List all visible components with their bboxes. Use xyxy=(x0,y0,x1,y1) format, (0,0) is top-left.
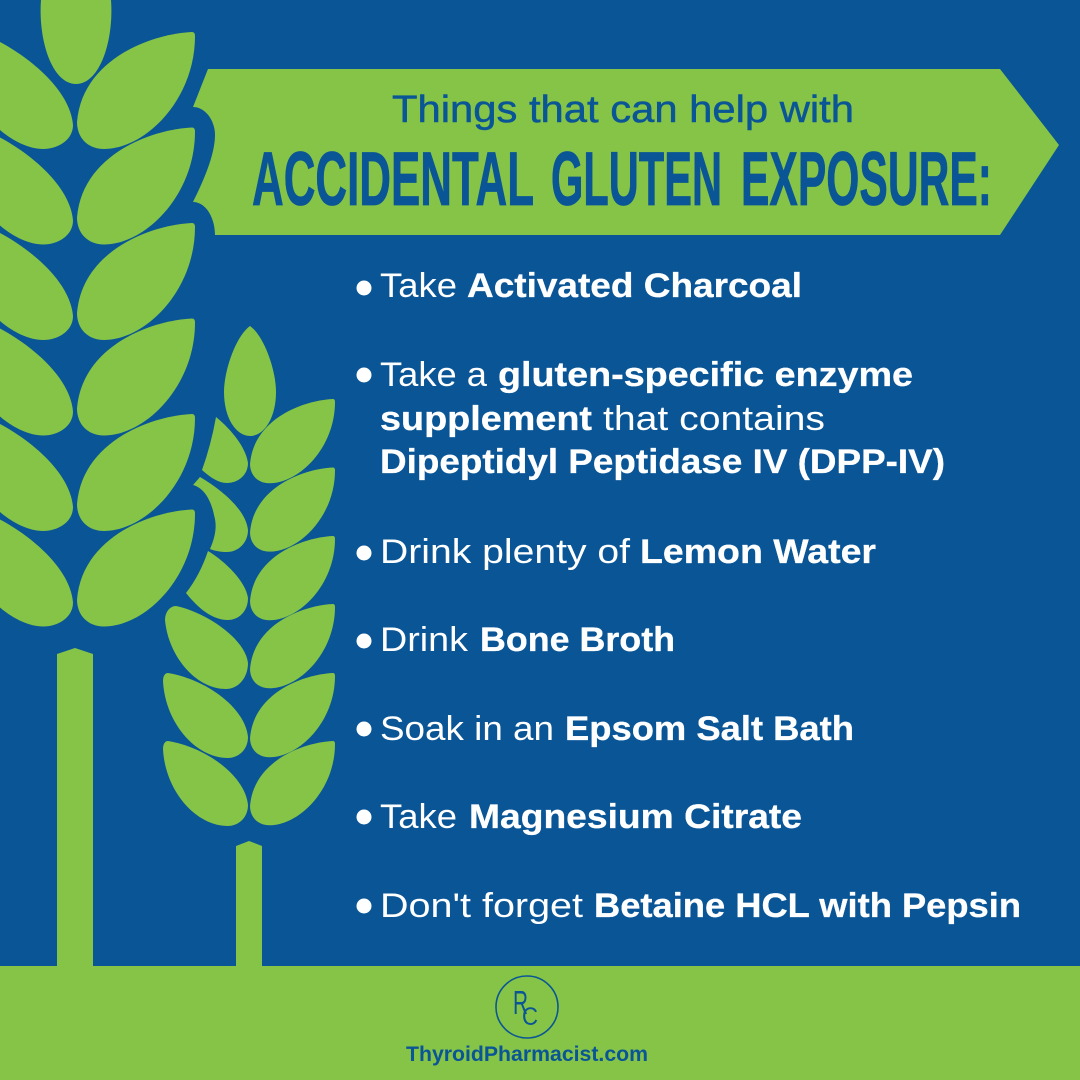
list item: betaine hcl: Don't forget xyxy=(380,887,584,925)
list item: enzyme supplement: Dipeptidyl Peptidase IV (DPP-IV) xyxy=(380,443,945,481)
list item: lemon water: Drink plenty of xyxy=(380,533,631,571)
ground band xyxy=(0,966,1080,1080)
list item: magnesium citrate: Magnesium Citrate xyxy=(469,798,802,836)
list item: epsom salt bath xyxy=(356,710,854,748)
small wheat plant xyxy=(163,326,335,970)
list item: enzyme supplement: that contains xyxy=(603,400,825,438)
list item: bone broth: Drink xyxy=(380,621,469,659)
list item: enzyme supplement: Take a xyxy=(380,356,487,394)
list item: betaine hcl: Betaine HCL with Pepsin xyxy=(594,887,1021,925)
list item: enzyme supplement xyxy=(356,356,945,481)
website address: ThyroidPharmacist.com xyxy=(406,1043,648,1066)
subtitle: Things that can help with xyxy=(392,89,854,131)
list item: epsom salt bath: Epsom Salt Bath xyxy=(565,710,854,748)
main heading: GLUTEN xyxy=(551,137,722,222)
main heading xyxy=(252,137,992,222)
main heading: ACCIDENTAL xyxy=(252,137,534,222)
logo: RC monogram: C xyxy=(522,1003,538,1031)
title banner xyxy=(193,69,1059,235)
list item: activated charcoal xyxy=(356,267,802,305)
list item: epsom salt bath: Soak in an xyxy=(380,710,554,748)
list item: activated charcoal: Take xyxy=(380,267,457,305)
list item: bone broth: Bone Broth xyxy=(480,621,675,659)
list item: bone broth xyxy=(356,621,675,659)
logo: RC monogram: R xyxy=(513,984,528,1021)
large wheat plant xyxy=(0,0,195,970)
list item: magnesium citrate: Take xyxy=(380,798,457,836)
list item: lemon water: Lemon Water xyxy=(640,533,876,571)
list item: betaine hcl xyxy=(356,887,1021,925)
list item: activated charcoal: Activated Charcoal xyxy=(467,267,802,305)
list item: enzyme supplement: gluten-specific enzyme xyxy=(498,356,913,394)
logo: RC monogram xyxy=(496,976,558,1038)
list item: enzyme supplement: supplement xyxy=(380,400,592,438)
list item: magnesium citrate xyxy=(356,798,802,836)
list item: lemon water xyxy=(356,533,876,571)
